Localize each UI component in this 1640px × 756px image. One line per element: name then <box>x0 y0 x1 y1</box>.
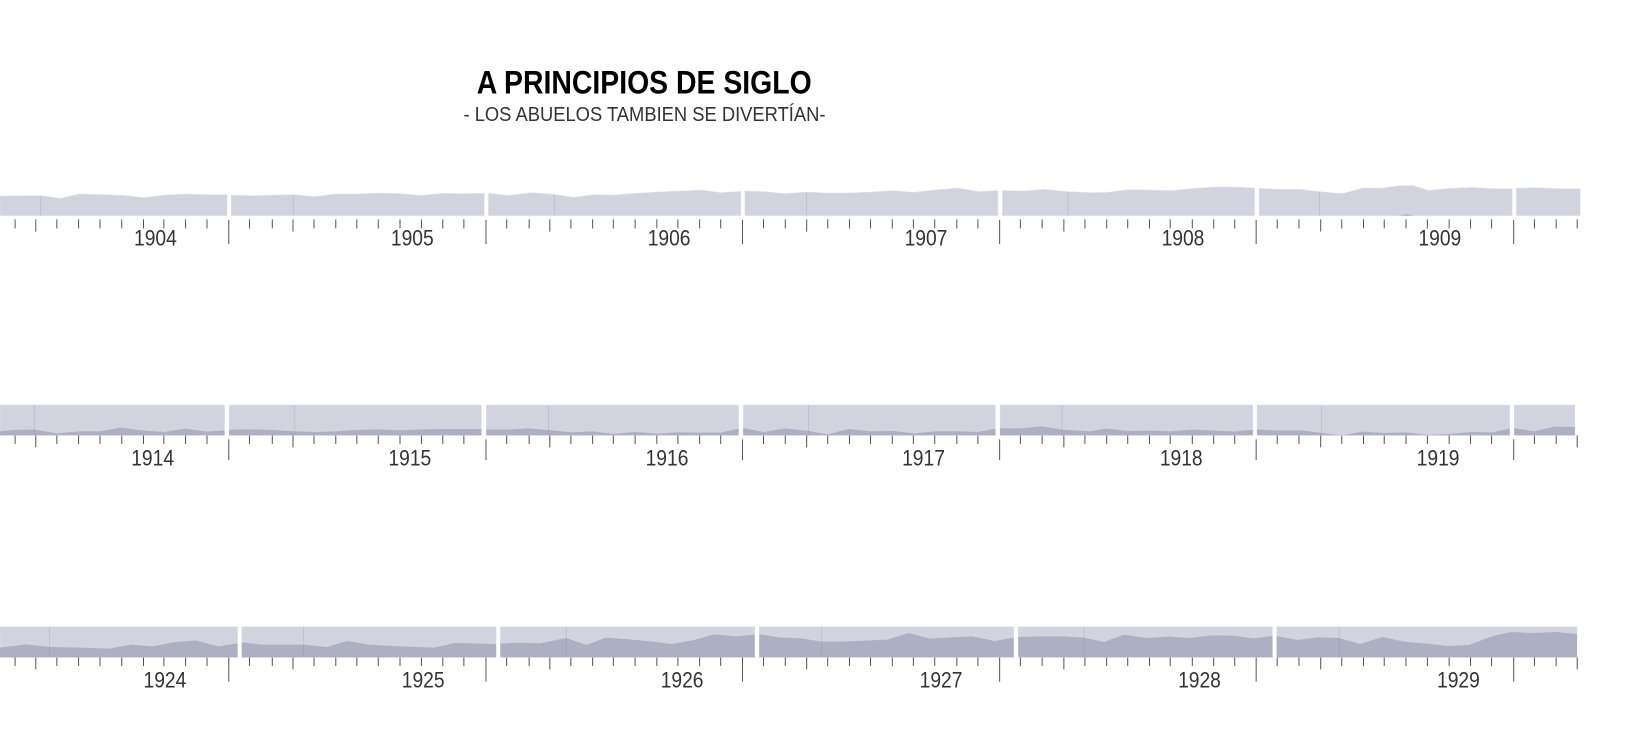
year block 1904 <box>0 194 227 251</box>
year block 1909 <box>1259 186 1512 251</box>
year block 1906: 1906 <box>648 225 691 251</box>
year block 1918 <box>1000 405 1253 471</box>
year block 1910 partial <box>1516 188 1580 216</box>
year block 1904: 1904 <box>134 225 177 251</box>
year block 1929 <box>1277 627 1577 692</box>
year block 1909: 1909 <box>1418 225 1461 251</box>
title: A PRINCIPIOS DE SIGLO <box>477 64 812 100</box>
year block 1925: 1925 <box>402 667 445 692</box>
axis ticks row 1 <box>15 219 1577 244</box>
year block 1928 <box>1018 627 1272 692</box>
year block 1924: 1924 <box>144 667 187 692</box>
year block 1920 partial <box>1514 405 1575 435</box>
year block 1924 <box>0 627 238 692</box>
year block 1905 <box>231 193 484 251</box>
year block 1919: 1919 <box>1417 445 1459 471</box>
year block 1906 <box>488 190 741 251</box>
timeline row: 1924-1929 <box>0 627 1577 692</box>
year block 1929: 1929 <box>1437 667 1480 692</box>
year block 1915: 1915 <box>388 445 431 471</box>
year block 1919 <box>1257 405 1510 471</box>
year block 1928: 1928 <box>1178 667 1221 692</box>
axis ticks row 3 <box>15 657 1577 682</box>
year block 1917: 1917 <box>902 445 945 471</box>
year block 1905: 1905 <box>391 225 434 251</box>
year block 1916: 1916 <box>646 445 688 471</box>
year block 1917 <box>743 405 995 471</box>
axis ticks row 2 <box>15 435 1577 460</box>
timeline row: 1914-1920 <box>0 405 1577 471</box>
year block 1907: 1907 <box>905 225 947 251</box>
year block 1915 <box>229 405 481 471</box>
year block 1925 <box>242 627 496 692</box>
subtitle: - LOS ABUELOS TAMBIEN SE DIVERTÍAN- <box>464 103 826 126</box>
year block 1908: 1908 <box>1162 225 1204 251</box>
year block 1926 <box>500 627 755 692</box>
year block 1916 <box>486 405 739 471</box>
year block 1927 <box>759 627 1014 692</box>
year block 1918: 1918 <box>1160 445 1203 471</box>
year block 1907 <box>745 188 998 251</box>
year block 1914 <box>0 405 225 471</box>
year block 1927: 1927 <box>920 667 962 692</box>
year block 1926: 1926 <box>661 667 704 692</box>
year block 1908 <box>1002 187 1255 251</box>
timeline row: 1904-1910 <box>0 186 1580 251</box>
year block 1914: 1914 <box>131 445 174 471</box>
